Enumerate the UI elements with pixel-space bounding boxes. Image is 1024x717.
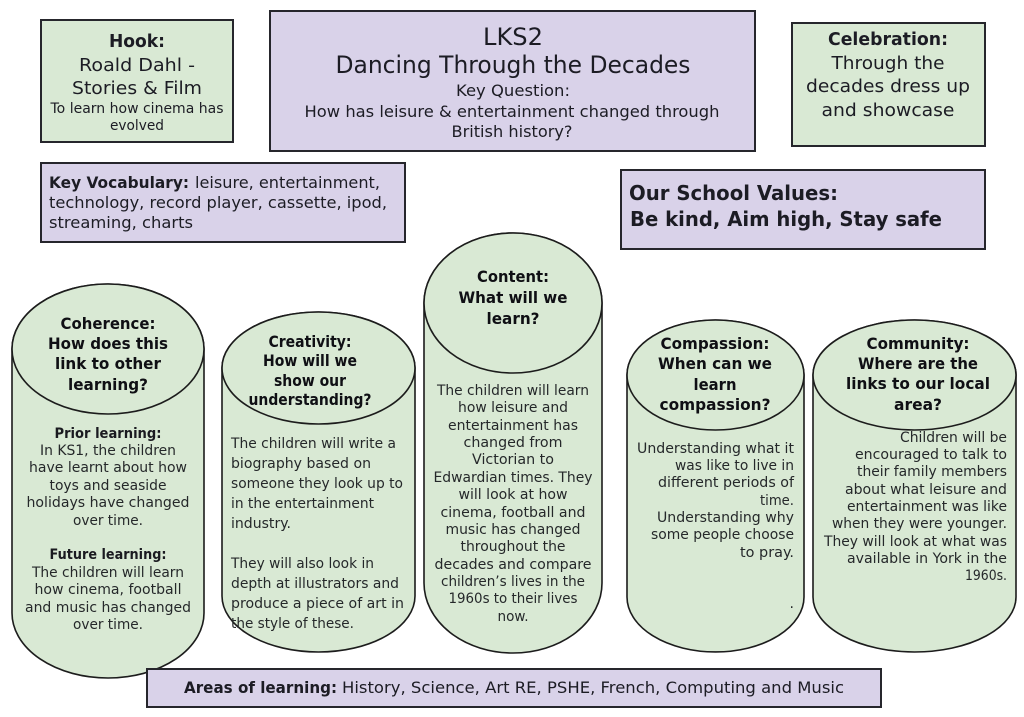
panel: coherence cylinder: over time. (73, 617, 143, 633)
panel: community cylinder: They will look at what was (823, 534, 1007, 550)
panel: compassion cylinder: was like to live in (675, 458, 794, 474)
panel: school values (621, 170, 985, 249)
panel: community cylinder: Where are the (858, 354, 978, 373)
panel: creativity cylinder: biography based on (231, 456, 371, 472)
panel: content cylinder: cinema, football and (440, 505, 586, 521)
panel: community cylinder: area? (894, 395, 942, 414)
panel: community cylinder: their family members (857, 464, 1007, 480)
panel: creativity cylinder (222, 312, 415, 652)
panel: content cylinder: throughout the (460, 539, 566, 555)
panel: areas of learning: History, Science, Art RE, PSHE, French, Computing and Music (342, 678, 844, 697)
panel: compassion cylinder: some people choose (651, 527, 794, 543)
panel: coherence cylinder: and music has changed (25, 600, 191, 616)
panel: community cylinder: links to our local (846, 374, 990, 393)
panel: content cylinder: how leisure and (458, 400, 568, 416)
panel: hook (41, 20, 233, 142)
panel: creativity cylinder: Creativity: (268, 332, 352, 351)
panel: creativity cylinder: in the entertainment (231, 496, 374, 512)
panel: compassion cylinder: Understanding what it (637, 441, 795, 457)
panel: creativity cylinder: produce a piece of art in (231, 596, 404, 612)
panel: hook: Roald Dahl - (79, 55, 195, 76)
panel: celebration: decades dress up (806, 76, 970, 97)
panel: coherence cylinder: holidays have changed (26, 495, 190, 511)
panel: coherence cylinder: toys and seaside (50, 478, 166, 494)
panel: hook: Hook: (109, 31, 165, 52)
panel: celebration: Celebration: (828, 29, 948, 50)
panel: key vocabulary: technology, record player, cassette, ipod, (49, 193, 387, 212)
panel: content cylinder: entertainment has (448, 418, 578, 434)
panel: content cylinder: children’s lives in the (441, 574, 585, 590)
panel: community cylinder (813, 320, 1016, 652)
panel: compassion cylinder: different periods of (658, 475, 795, 491)
panel: coherence cylinder: Coherence: (60, 314, 156, 333)
panel: content cylinder: Victorian to (472, 452, 554, 468)
panel: content cylinder: Content: (477, 267, 549, 286)
panel: creativity cylinder: the style of these. (231, 616, 354, 632)
panel: content cylinder: Edwardian times. They (434, 470, 592, 486)
panel: compassion cylinder: Understanding why (657, 510, 794, 526)
panel: key vocabulary: streaming, charts (49, 213, 193, 232)
panel: title and key question: Dancing Through the Decades (336, 51, 690, 79)
panel: title and key question: How has leisure & entertainment changed through (304, 102, 720, 121)
panel: hook: To learn how cinema has (49, 101, 224, 117)
panel: creativity cylinder: show our (274, 371, 346, 390)
panel: content cylinder: changed from (464, 435, 562, 451)
panel: compassion cylinder: . (790, 596, 794, 612)
panel: school values: Be kind, Aim high, Stay safe (630, 207, 942, 231)
panel: creativity cylinder: industry. (231, 516, 291, 532)
panel: community cylinder: entertainment was like (847, 499, 1007, 515)
panel: hook: evolved (110, 118, 164, 134)
panel: content cylinder: will look at how (458, 487, 568, 503)
panel: content cylinder: music has changed (446, 522, 580, 538)
panel: hook: Stories & Film (72, 78, 202, 99)
panel: coherence cylinder (12, 284, 204, 678)
panel: compassion cylinder: compassion? (660, 395, 770, 414)
panel: coherence cylinder: The children will learn (31, 565, 184, 581)
panel: celebration: Through the (830, 53, 944, 74)
panel: compassion cylinder: to pray. (740, 545, 794, 561)
panel: compassion cylinder: Compassion: (660, 334, 770, 353)
panel: key vocabulary: Key Vocabulary: (49, 173, 189, 192)
panel: community cylinder: encouraged to talk to (855, 447, 1007, 463)
panel: compassion cylinder: time. (760, 493, 794, 509)
panel: key vocabulary (41, 163, 405, 242)
panel: community cylinder: Children will be (900, 430, 1007, 446)
panel: community cylinder: when they were younger. (832, 516, 1007, 532)
panel: title and key question: Key Question: (456, 81, 570, 100)
panel: content cylinder: now. (498, 609, 528, 625)
panel: coherence cylinder: How does this (48, 334, 168, 353)
panel: community cylinder: about what leisure and (845, 482, 1007, 498)
panel: coherence cylinder: over time. (73, 513, 143, 529)
panel: coherence cylinder: how cinema, football (34, 582, 182, 598)
panel: coherence cylinder: In KS1, the children (40, 443, 176, 459)
panel: coherence cylinder: have learnt about how (29, 460, 187, 476)
panel: title and key question: British history? (452, 122, 572, 141)
panel: coherence cylinder: Future learning: (50, 547, 166, 563)
panel: content cylinder (424, 233, 602, 653)
panel: creativity cylinder: They will also look in (230, 556, 374, 572)
panel: school values: Our School Values: (629, 181, 838, 205)
panel: content cylinder: decades and compare (434, 557, 592, 573)
panel: celebration (792, 23, 985, 146)
panel: community cylinder: Community: (866, 334, 970, 353)
panel: community cylinder: available in York in the (847, 551, 1007, 567)
panel: community cylinder: 1960s. (965, 568, 1007, 584)
panel: celebration: and showcase (822, 100, 954, 121)
panel: content cylinder: learn? (486, 309, 540, 328)
panel: areas of learning: Areas of learning: (184, 678, 337, 697)
panel: creativity cylinder: someone they look up to (231, 476, 403, 492)
panel: creativity cylinder: understanding? (248, 390, 372, 409)
panel: compassion cylinder (627, 320, 804, 652)
panel: coherence cylinder: learning? (68, 375, 148, 394)
panel: content cylinder: The children will learn (436, 383, 589, 399)
panel: content cylinder: What will we (458, 288, 568, 307)
panel: coherence cylinder: Prior learning: (54, 426, 162, 442)
panel: coherence cylinder: link to other (55, 354, 161, 373)
panel: creativity cylinder: The children will write a (230, 436, 396, 452)
panel: key vocabulary: leisure, entertainment, (195, 173, 380, 192)
panel: title and key question: LKS2 (483, 23, 543, 51)
panel: creativity cylinder: depth at illustrators and (231, 576, 399, 592)
panel: content cylinder: 1960s to their lives (448, 591, 578, 607)
panel: title and key question (270, 11, 755, 151)
panel: areas of learning (147, 669, 881, 707)
panel: compassion cylinder: learn (694, 375, 736, 394)
panel: compassion cylinder: When can we (658, 354, 772, 373)
panel: creativity cylinder: How will we (263, 351, 357, 370)
